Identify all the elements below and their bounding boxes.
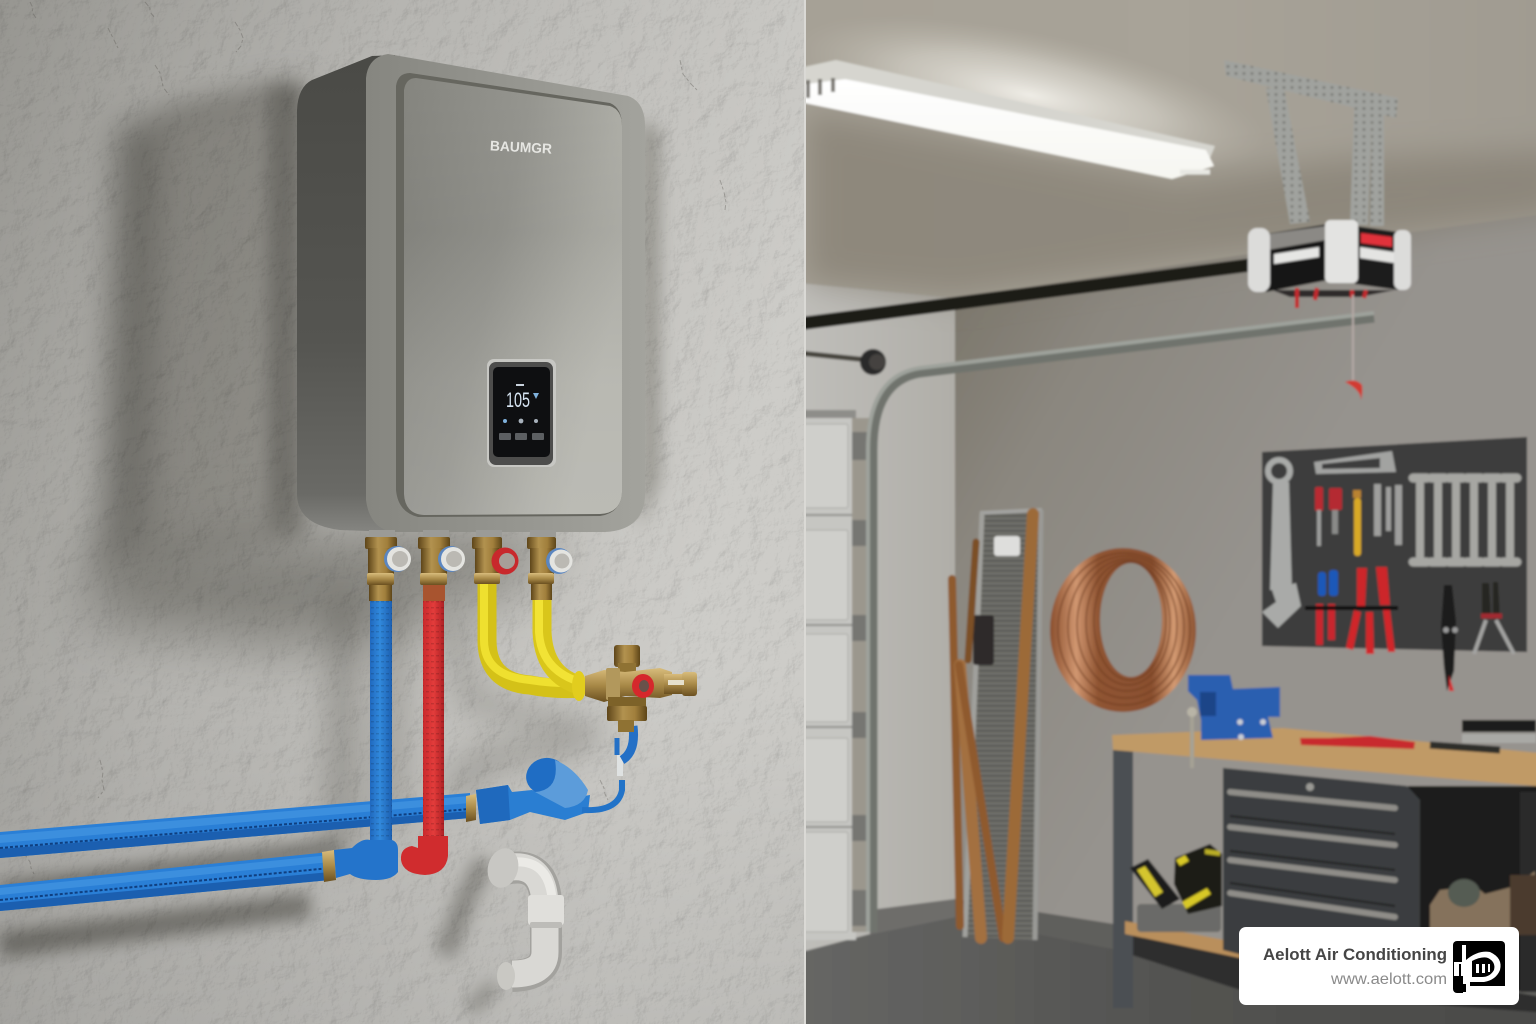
wall edge [804, 0, 806, 1024]
blue elbow tee [334, 840, 398, 880]
wooden bench top [1112, 728, 1536, 788]
front raised panel [404, 78, 622, 515]
garage floor [790, 917, 1536, 1024]
digital control display [487, 359, 556, 467]
heater front casing [366, 54, 645, 532]
lower wall shade [0, 0, 806, 1024]
fluorescent ceiling light [790, 60, 1215, 179]
blue coupler and return fitting [466, 753, 590, 824]
right side: garage interior background [782, 0, 1536, 1024]
yellow power tools on shelf [1130, 844, 1222, 932]
back wall baseboard [955, 899, 1536, 1015]
garage door opener [1248, 220, 1411, 400]
blue cold water pipe [370, 600, 392, 845]
brass ring lower [322, 850, 336, 882]
ceiling mount bracket [1224, 60, 1398, 226]
display status marks [503, 384, 539, 423]
needle nose pliers [1474, 582, 1514, 654]
hanging pliers [1441, 585, 1458, 691]
upper horizontal blue pipe [0, 793, 470, 858]
blue handled screwdrivers [1316, 570, 1338, 645]
vertical door track and horizontal rail [852, 313, 1374, 932]
copper coil [1050, 548, 1196, 712]
main plumbing [0, 530, 697, 990]
large adjustable wrench [1262, 460, 1301, 628]
valve 1 cold [365, 530, 411, 601]
ceiling [790, 0, 1536, 298]
plaster texture [0, 0, 806, 1024]
pegboard with hand tools [1262, 437, 1527, 691]
flat wrench [1314, 451, 1396, 474]
plaster cracks [20, 2, 726, 874]
spanner set [1413, 478, 1517, 562]
lower horizontal blue pipe [0, 852, 330, 911]
company website: www.aelott.com [1330, 971, 1447, 988]
front panel recess shadow [396, 73, 622, 517]
heater side face [297, 55, 395, 532]
baskets under bench [1430, 871, 1536, 935]
company name: Aelott Air Conditioning [1263, 945, 1447, 964]
yellow gas flex line left [487, 582, 582, 689]
yellow gas flex line right [542, 600, 582, 686]
bench vise [1187, 675, 1280, 768]
workbench frame and underside [1113, 750, 1536, 1014]
wall base colour [0, 0, 806, 1024]
unit shadow on wall [90, 84, 660, 650]
small blue drain line [582, 726, 634, 810]
valve 2 [418, 530, 465, 601]
tankless water heater [297, 54, 645, 532]
red hot water pipe [423, 600, 444, 840]
ceiling shade beneath light [806, 110, 1536, 298]
yellow pipe collar [572, 671, 586, 701]
valve 4 [527, 530, 572, 600]
display buttons [499, 433, 544, 440]
white condensate pipe [483, 845, 564, 990]
wooden poles [952, 514, 1033, 938]
brand name: BAUMGR [490, 137, 552, 157]
brass mixing valve [585, 645, 697, 732]
garage back wall [955, 205, 1536, 1024]
badge background [1239, 927, 1519, 1005]
pipe shadows on wall [0, 600, 600, 1010]
leaning ladder panel [963, 510, 1042, 940]
black opener rail [790, 264, 1258, 325]
brand badge [1239, 927, 1519, 1005]
brass shut-off valves [365, 530, 572, 601]
red handled tools [1305, 567, 1398, 654]
red elbow [401, 836, 448, 875]
badge logo [1453, 941, 1505, 993]
garage door panels [790, 410, 856, 940]
tools on bench [1300, 720, 1536, 750]
small spanners [1375, 485, 1401, 544]
bench drawers [1223, 768, 1420, 1000]
light glow on ceiling [782, 0, 1278, 206]
torsion bar and drum [790, 349, 886, 375]
valve 3 hot [472, 530, 518, 584]
garage side wall [790, 282, 955, 955]
left side: plaster wall [0, 0, 806, 1024]
small drivers [1315, 487, 1361, 556]
side wall baseboard [870, 899, 955, 934]
temperature readout: 105 [506, 389, 530, 412]
